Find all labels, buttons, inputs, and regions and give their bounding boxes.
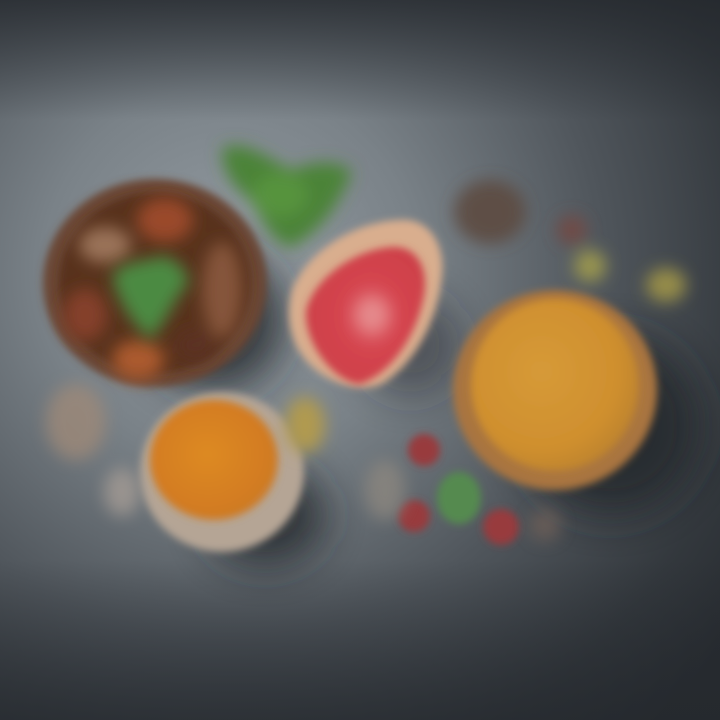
grapefruit slice	[289, 220, 442, 388]
scattered spices left	[46, 384, 561, 541]
small bowl of orange spice	[140, 392, 304, 552]
shadows under bowls	[145, 250, 700, 565]
icon: green herb garnish	[112, 255, 188, 340]
lemon piece	[285, 397, 325, 453]
red berries	[398, 434, 519, 545]
icon: small green leaf	[437, 472, 481, 524]
brown bowl with spiced food	[43, 179, 267, 387]
icon: green leaves top	[222, 145, 352, 248]
large bowl of golden spice	[453, 290, 657, 490]
scattered spices top right	[454, 180, 686, 302]
